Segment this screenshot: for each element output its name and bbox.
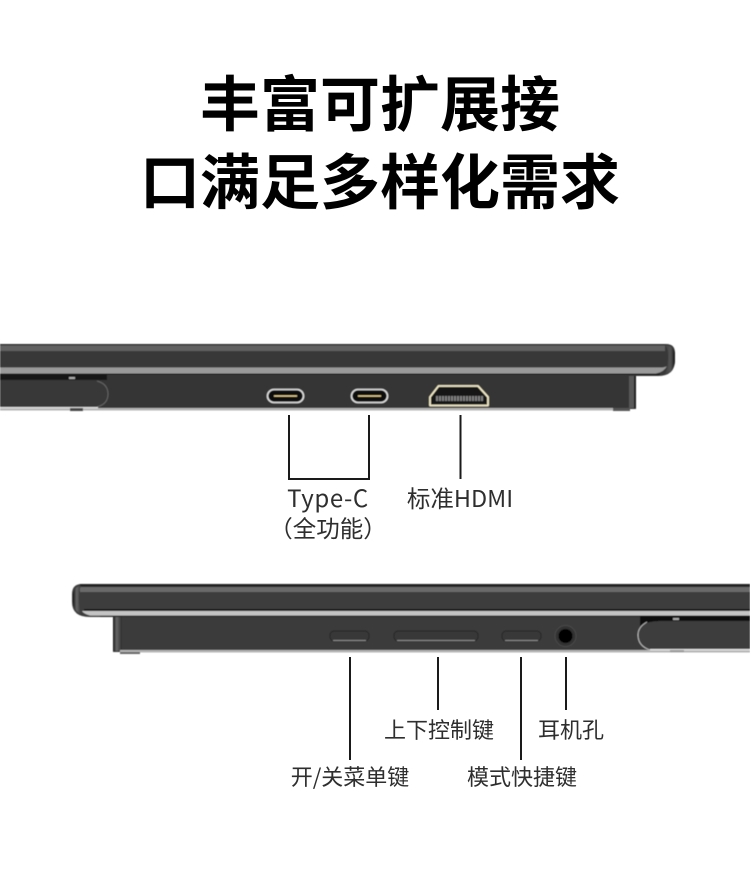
device: bottom side view	[72, 584, 750, 654]
callout: power/menu key	[291, 657, 409, 792]
kickstand slot	[638, 616, 750, 652]
callout: HDMI: 标准HDMI	[407, 480, 513, 514]
port: HDMI	[430, 386, 488, 406]
button: power/menu	[330, 631, 369, 641]
stand body	[113, 615, 750, 652]
stand body	[0, 373, 636, 409]
callout: Type-C	[269, 415, 387, 544]
kickstand slot	[0, 380, 108, 408]
callout: headphone jack: 耳机孔	[538, 713, 604, 745]
button: up/down control	[394, 631, 478, 641]
callout: mode shortcut key: 模式快捷键	[467, 760, 577, 792]
callout: Type-C: （全功能）	[269, 510, 387, 544]
port: Type-C left	[268, 390, 304, 402]
port: headphone jack	[555, 626, 576, 646]
screen bezel	[0, 344, 675, 376]
button: mode shortcut	[502, 631, 541, 641]
callout: power/menu key: 开/关菜单键	[291, 760, 409, 792]
device: top side view	[0, 344, 675, 411]
callout: headphone jack	[538, 657, 604, 745]
title	[140, 57, 620, 222]
title: 口满足多样化需求	[140, 135, 620, 222]
callout: HDMI	[407, 415, 513, 514]
callout: up/down key: 上下控制键	[384, 713, 494, 745]
port: Type-C right	[352, 390, 388, 402]
callout: mode shortcut key	[467, 657, 577, 792]
title: 丰富可扩展接	[200, 57, 560, 144]
callout: Type-C: Type-C	[287, 479, 369, 514]
screen bezel	[72, 584, 750, 617]
callout: up/down key	[384, 657, 494, 745]
